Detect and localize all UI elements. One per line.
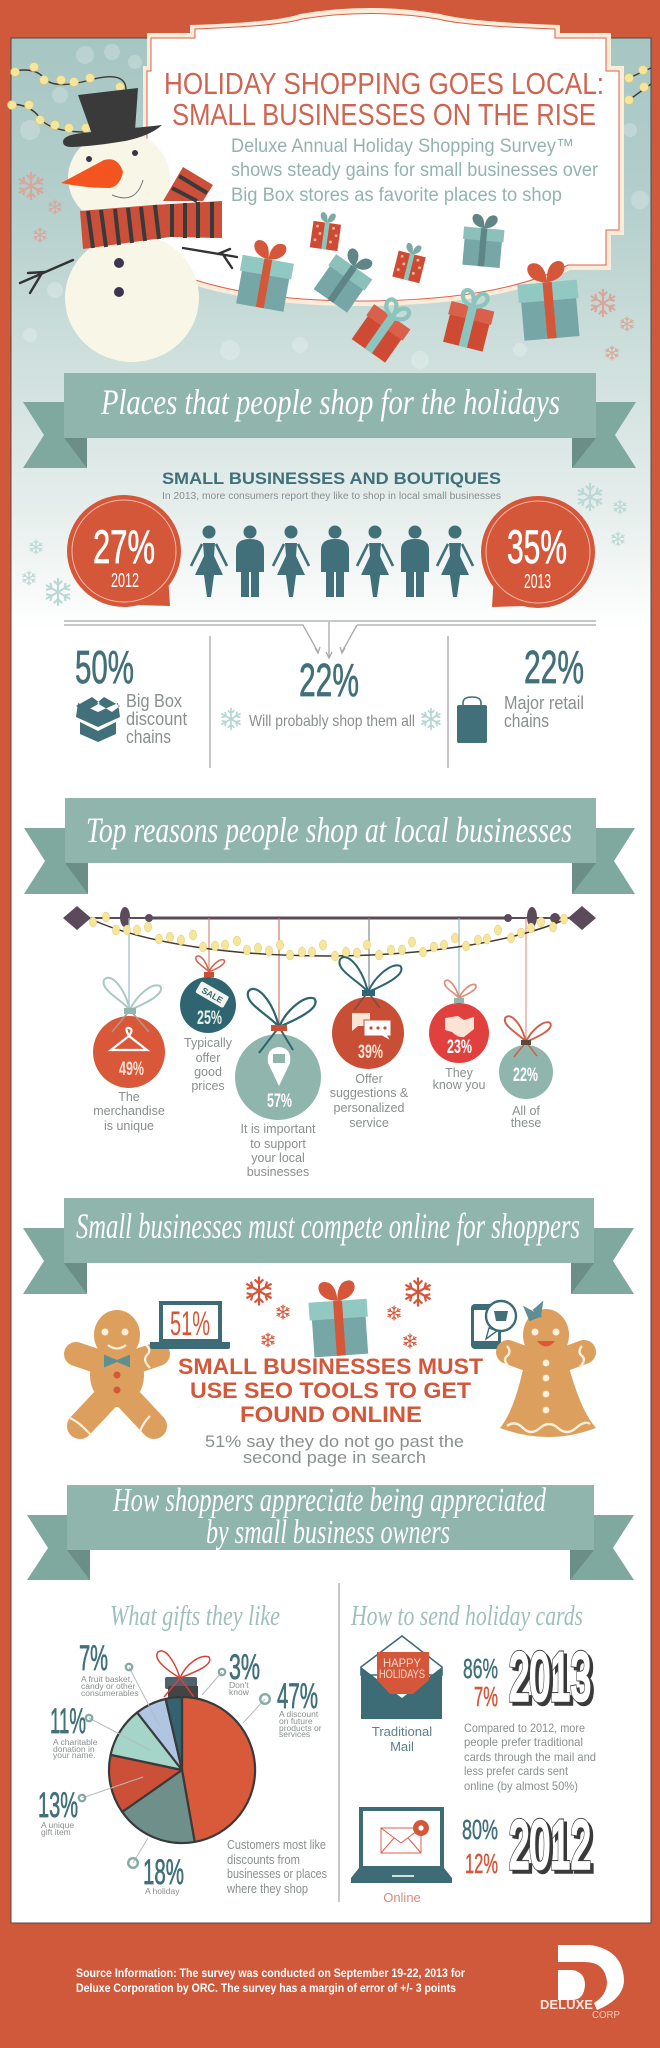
ornament 22%: these bbox=[511, 1116, 541, 1130]
badge 2012: 2012 bbox=[111, 570, 139, 592]
seo subtext: second page in search bbox=[243, 1448, 426, 1467]
stats 2013 bbox=[463, 1639, 594, 1718]
heading: small businesses: SMALL BUSINESSES AND BOUTIQUES bbox=[162, 469, 501, 488]
ornament strings bbox=[129, 918, 526, 1042]
icon: envelope: HOLIDAYS bbox=[379, 1667, 425, 1681]
ornament 22%: 22% bbox=[513, 1065, 538, 1086]
stats 2012: 12% bbox=[465, 1848, 498, 1879]
label online: Online bbox=[383, 1890, 421, 1905]
ornament 23%: know you bbox=[433, 1078, 485, 1092]
eyes bbox=[86, 150, 138, 162]
label 18% bbox=[143, 1853, 184, 1896]
ribbon bbox=[157, 1651, 210, 1697]
phone with cart bubble bbox=[471, 1301, 516, 1349]
label 13%: gift item bbox=[41, 1827, 71, 1837]
stat: shop them all 22% bbox=[221, 654, 441, 730]
stat: big box 50%: 50% bbox=[75, 641, 134, 693]
comparison note: cards through the mail and bbox=[464, 1750, 596, 1764]
badge 2013: 35% bbox=[507, 520, 567, 573]
badge 2012 bbox=[67, 495, 181, 607]
stat: big box 50% bbox=[75, 641, 187, 747]
ornament 39%: personalized bbox=[334, 1101, 404, 1115]
stats 2012: 80% bbox=[462, 1814, 498, 1845]
ornament 39%: 39% bbox=[358, 1042, 383, 1063]
ornament 49%: 49% bbox=[119, 1059, 144, 1080]
badge 2013 bbox=[481, 496, 595, 608]
banner: appreciation: by small business owners bbox=[206, 1514, 450, 1551]
banner: compete online bbox=[23, 1198, 634, 1294]
customers note bbox=[226, 1838, 327, 1896]
column divider bbox=[338, 1583, 340, 1902]
ornament 49%: is unique bbox=[104, 1119, 154, 1133]
sale tag: SALE bbox=[200, 985, 225, 1005]
subtitle: shows steady gains for small businesses over bbox=[231, 160, 599, 181]
stats 2013: 2013 bbox=[509, 1639, 591, 1715]
label 11%: A charitable bbox=[53, 1737, 98, 1747]
label 18%: A holiday bbox=[145, 1886, 180, 1896]
label 7%: A fruit basket, bbox=[81, 1674, 132, 1684]
label 47%: products or bbox=[279, 1723, 322, 1733]
ornament 25%: 25% bbox=[197, 1008, 222, 1029]
banner: appreciation bbox=[27, 1482, 634, 1580]
stat: retail 22%: Major retail bbox=[504, 693, 584, 713]
seo heading: FOUND ONLINE bbox=[240, 1402, 422, 1427]
source note bbox=[76, 1966, 465, 1995]
label 7% bbox=[79, 1639, 139, 1698]
seo heading: USE SEO TOOLS TO GET bbox=[190, 1378, 471, 1403]
snowman bbox=[20, 88, 237, 362]
stats 2013: 2013 bbox=[512, 1642, 594, 1718]
deluxe logo bbox=[540, 1945, 624, 2021]
label 47%: on future bbox=[279, 1716, 313, 1726]
deluxe logo: DELUXE bbox=[540, 1998, 593, 2012]
label 18%: 18% bbox=[143, 1853, 184, 1892]
label 3% bbox=[229, 1648, 260, 1697]
stat: shop them all 22%: 22% bbox=[299, 654, 359, 706]
seo subtext: 51% say they do not go past the bbox=[205, 1432, 464, 1451]
badge 2013: 2013 bbox=[524, 571, 551, 593]
customers note: where they shop bbox=[226, 1882, 308, 1896]
pie leader lines bbox=[79, 1664, 270, 1868]
label 7%: candy or other bbox=[81, 1681, 136, 1691]
label traditional mail: Traditional bbox=[372, 1724, 432, 1739]
seo heading: SMALL BUSINESSES MUST bbox=[178, 1354, 483, 1379]
subtitle: Big Box stores as favorite places to shop bbox=[231, 185, 562, 206]
icon: open box bbox=[76, 697, 120, 742]
seo subtext bbox=[205, 1432, 464, 1467]
top hat bbox=[63, 88, 162, 147]
snowflakes right bbox=[591, 289, 634, 360]
ornament 57%: It is important bbox=[240, 1122, 316, 1136]
heading: small businesses: In 2013, more consumers report they like to shop in local small businesses bbox=[162, 491, 501, 502]
subtitle: Deluxe Annual Holiday Shopping Survey™ bbox=[231, 136, 574, 157]
icon: shopping bag bbox=[457, 697, 487, 743]
ornament 57%: your local bbox=[251, 1151, 305, 1165]
ornament rod bbox=[63, 906, 596, 930]
label 3%: 3% bbox=[229, 1648, 260, 1687]
deluxe logo: CORP bbox=[592, 2009, 620, 2021]
ornament 22%: All of bbox=[512, 1104, 540, 1118]
icon: envelope bbox=[361, 1636, 442, 1719]
comparison note: online (by almost 50%) bbox=[464, 1779, 578, 1793]
ornament 25%: good bbox=[194, 1065, 222, 1079]
heading: small businesses bbox=[162, 469, 501, 502]
ornament 57% bbox=[235, 989, 321, 1179]
carrot nose bbox=[61, 159, 123, 188]
heading: send cards: How to send holiday cards bbox=[350, 1600, 583, 1632]
smile bbox=[112, 180, 143, 198]
label 3%: know bbox=[229, 1687, 250, 1697]
stats 2012 bbox=[462, 1807, 594, 1886]
seo heading bbox=[178, 1354, 483, 1427]
label 47%: 47% bbox=[277, 1677, 318, 1716]
snowman body bbox=[65, 234, 199, 362]
pie chart bbox=[109, 1697, 255, 1843]
teal snowflakes bbox=[22, 483, 627, 606]
red snowflakes bbox=[246, 1276, 431, 1348]
ornament 49%: The bbox=[118, 1090, 140, 1104]
ornament 39% bbox=[330, 957, 409, 1130]
stats 2013: 7% bbox=[474, 1681, 498, 1712]
title bbox=[164, 66, 604, 132]
customers note: businesses or places bbox=[227, 1867, 327, 1881]
label 11% bbox=[50, 1702, 98, 1760]
ornament 22% bbox=[499, 1016, 553, 1130]
ornament 39%: suggestions & bbox=[330, 1086, 409, 1100]
gingerbread man bbox=[70, 1310, 158, 1436]
label traditional mail bbox=[372, 1724, 432, 1754]
label 11%: 11% bbox=[50, 1702, 86, 1741]
label 13%: A unique bbox=[41, 1820, 74, 1830]
icon: hanger bbox=[111, 1028, 147, 1050]
icon: envelope: HAPPY bbox=[383, 1656, 421, 1670]
stat: shop them all 22%: Will probably shop them all bbox=[249, 713, 415, 730]
label 13% bbox=[38, 1786, 78, 1837]
stats 2013: 2013 bbox=[509, 1639, 591, 1715]
comparison note: Compared to 2012, more bbox=[464, 1721, 585, 1735]
ornament 25%: offer bbox=[196, 1051, 220, 1065]
ornament 49% bbox=[93, 978, 165, 1133]
stat: retail 22%: chains bbox=[504, 711, 549, 731]
gifts bbox=[234, 211, 582, 364]
light string top left bbox=[8, 62, 126, 132]
badge 2012: 27% bbox=[93, 520, 155, 573]
icon: handshake bbox=[445, 1016, 474, 1037]
subtitle bbox=[231, 136, 599, 206]
stat: big box 50%: chains bbox=[126, 727, 171, 747]
label 7%: consumerables bbox=[81, 1688, 139, 1698]
ornament 39%: Offer bbox=[355, 1072, 383, 1086]
gift center bbox=[307, 1279, 370, 1358]
bow tie bbox=[105, 1356, 129, 1366]
ornament 57%: 57% bbox=[267, 1091, 292, 1112]
icon: laptop online bbox=[351, 1809, 452, 1883]
label traditional mail: Mail bbox=[390, 1739, 414, 1754]
label 3%: Don't bbox=[229, 1680, 249, 1690]
people row bbox=[191, 526, 473, 597]
label 47%: A discount bbox=[279, 1709, 319, 1719]
ornament 39%: service bbox=[349, 1116, 389, 1130]
stats 2013: 86% bbox=[463, 1653, 498, 1684]
snowman arms bbox=[20, 248, 237, 293]
snowman head bbox=[68, 131, 170, 225]
laptop with 51%: 51% bbox=[170, 1305, 210, 1343]
banner: places bbox=[23, 373, 636, 468]
comparison note bbox=[464, 1721, 596, 1793]
label 11%: your name. bbox=[53, 1750, 96, 1760]
source note: Deluxe Corporation by ORC. The survey has a margin of error of +/- 3 points bbox=[76, 1981, 456, 1995]
stats 2012: 2012 bbox=[509, 1807, 591, 1883]
ornament 25% bbox=[180, 956, 236, 1093]
customers note: discounts from bbox=[227, 1853, 300, 1867]
light string top right bbox=[624, 66, 651, 104]
label 7%: 7% bbox=[79, 1639, 108, 1678]
stats 2012: 2012 bbox=[509, 1807, 591, 1883]
ornament 23%: They bbox=[445, 1066, 474, 1080]
label 47%: services bbox=[279, 1729, 310, 1739]
gingerbread woman bbox=[500, 1303, 596, 1437]
snowflakes left bbox=[19, 172, 62, 242]
label 11%: donation in bbox=[53, 1744, 95, 1754]
stat: retail 22% bbox=[457, 641, 584, 743]
ornament 57%: businesses bbox=[247, 1165, 309, 1179]
ornament cap bbox=[165, 1677, 198, 1698]
hair bow bbox=[525, 1303, 542, 1320]
holiday lights bbox=[89, 912, 568, 961]
ornament 49%: merchandise bbox=[93, 1104, 165, 1118]
ornament 23% bbox=[429, 980, 489, 1092]
scarf bbox=[80, 167, 222, 249]
icon: speech bubbles bbox=[352, 1013, 391, 1041]
stat: retail 22%: 22% bbox=[524, 641, 584, 693]
customers note: Customers most like bbox=[227, 1838, 326, 1852]
comparison note: people prefer traditional bbox=[464, 1735, 583, 1749]
source note: Source Information: The survey was conducted on September 19-22, 2013 for bbox=[76, 1966, 465, 1980]
label 13%: 13% bbox=[38, 1786, 78, 1825]
ornament 23%: 23% bbox=[447, 1037, 472, 1058]
stat: big box 50%: discount bbox=[126, 709, 187, 729]
ornament 25%: prices bbox=[191, 1079, 225, 1093]
icon: map pin bbox=[268, 1047, 290, 1086]
banner: top reasons bbox=[24, 798, 635, 894]
stat: big box 50%: Big Box bbox=[126, 691, 182, 711]
heading: what gifts: What gifts they like bbox=[110, 1600, 280, 1632]
ornament 25%: Typically bbox=[184, 1036, 233, 1050]
laptop with 51% bbox=[150, 1301, 230, 1349]
divider lines with arrows bbox=[64, 621, 596, 768]
comparison note: less prefer cards sent bbox=[464, 1764, 569, 1778]
pie ornament bbox=[109, 1651, 255, 1843]
ornament 57%: to support bbox=[250, 1137, 306, 1151]
buttons bbox=[114, 258, 124, 297]
stats 2012: 2012 bbox=[512, 1810, 594, 1886]
label 47% bbox=[277, 1677, 322, 1739]
title plaque bbox=[143, 8, 624, 306]
